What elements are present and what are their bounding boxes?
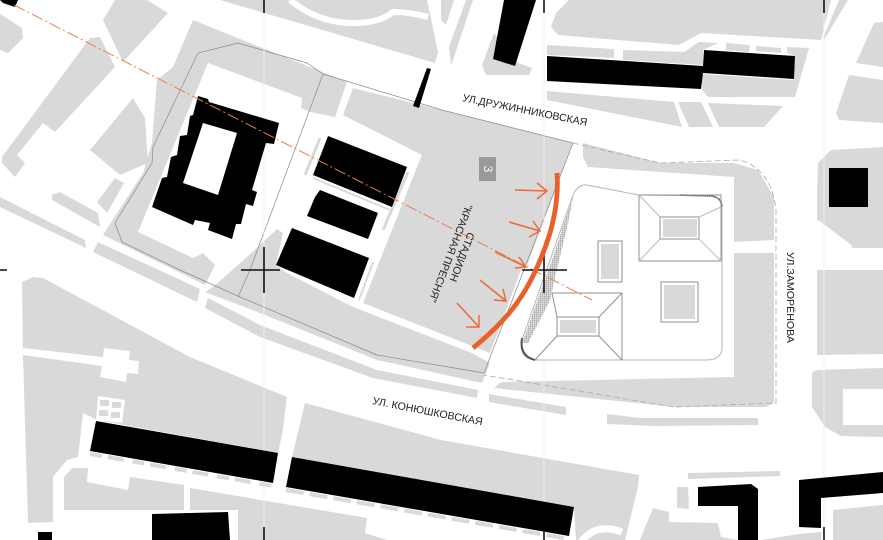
- development site outline: [521, 185, 722, 360]
- building entrance steps: [90, 454, 569, 539]
- stadium label: "КРАСНАЯ ПРЕСНЯ": [426, 202, 474, 304]
- hatched facade edge: [522, 192, 722, 360]
- small grid plaza: [96, 396, 125, 423]
- roof skylights: [560, 219, 697, 333]
- faint grid lines: [264, 0, 824, 540]
- street label: Zamorenova: УЛ.ЗАМОРЁНОВА: [784, 252, 796, 343]
- street label: Druzhinnikovskaya: УЛ.ДРУЖИННИКОВСКАЯ: [461, 92, 588, 129]
- building roofs: [535, 195, 721, 360]
- orange arrows: [457, 183, 547, 327]
- number badge 3: [479, 157, 496, 181]
- sight axis dash-dot line: [14, 5, 592, 300]
- dashed boundary: [484, 143, 776, 407]
- white paths over blocks: [23, 348, 305, 483]
- white curves in blocks: [290, 0, 428, 23]
- thin grey strips beside buildings: [305, 138, 408, 300]
- stadium label: СТАДИОН: [447, 230, 476, 283]
- courtyard: [183, 123, 237, 195]
- thin site boundary lines: [115, 43, 573, 373]
- orange curve: stadium edge: [473, 173, 557, 348]
- street label: Konyushkovskaya: УЛ. КОНЮШКОВСКАЯ: [371, 395, 484, 428]
- number badge 3: 3: [481, 166, 495, 173]
